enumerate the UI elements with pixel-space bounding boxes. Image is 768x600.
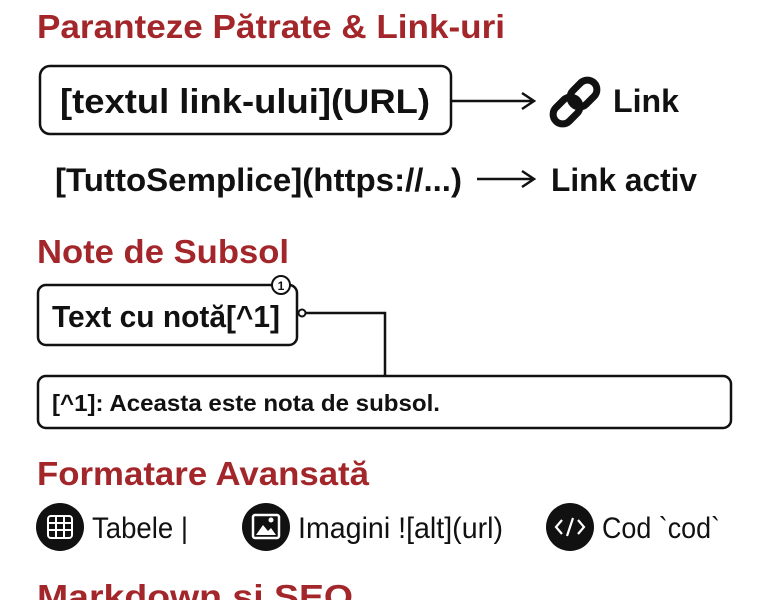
connector line bbox=[298, 310, 385, 376]
box: link syntax: [textul link-ului](URL) bbox=[60, 83, 430, 121]
item: code: Cod `cod` bbox=[602, 512, 720, 545]
arrow: to active link bbox=[477, 171, 534, 187]
icon: chain link bbox=[549, 76, 601, 128]
item: code bbox=[546, 503, 720, 551]
example link text: [TuttoSemplice](https://...) bbox=[55, 162, 462, 198]
badge: 1 bbox=[272, 276, 290, 294]
box: footnote reference bbox=[38, 285, 297, 345]
box: footnote definition: [^1]: Aceasta este nota de subsol. bbox=[52, 390, 440, 416]
item: images bbox=[242, 503, 503, 551]
heading: footnotes: Note de Subsol bbox=[37, 233, 289, 270]
title: Paranteze Pătrate & Link-uri bbox=[37, 8, 505, 45]
item: tables bbox=[36, 503, 188, 551]
box: footnote definition bbox=[38, 376, 731, 428]
arrow: to link bbox=[452, 93, 534, 109]
label: Link activ: Link activ bbox=[551, 162, 697, 198]
box: footnote reference: Text cu notă[^1] bbox=[52, 299, 280, 334]
label: Link: Link bbox=[613, 83, 679, 119]
badge: 1: 1 bbox=[278, 279, 285, 293]
box: link syntax bbox=[40, 66, 451, 134]
item: images: Imagini ![alt](url) bbox=[298, 512, 503, 545]
item: tables: Tabele | bbox=[92, 512, 188, 545]
heading: advanced formatting: Formatare Avansată bbox=[37, 455, 370, 492]
